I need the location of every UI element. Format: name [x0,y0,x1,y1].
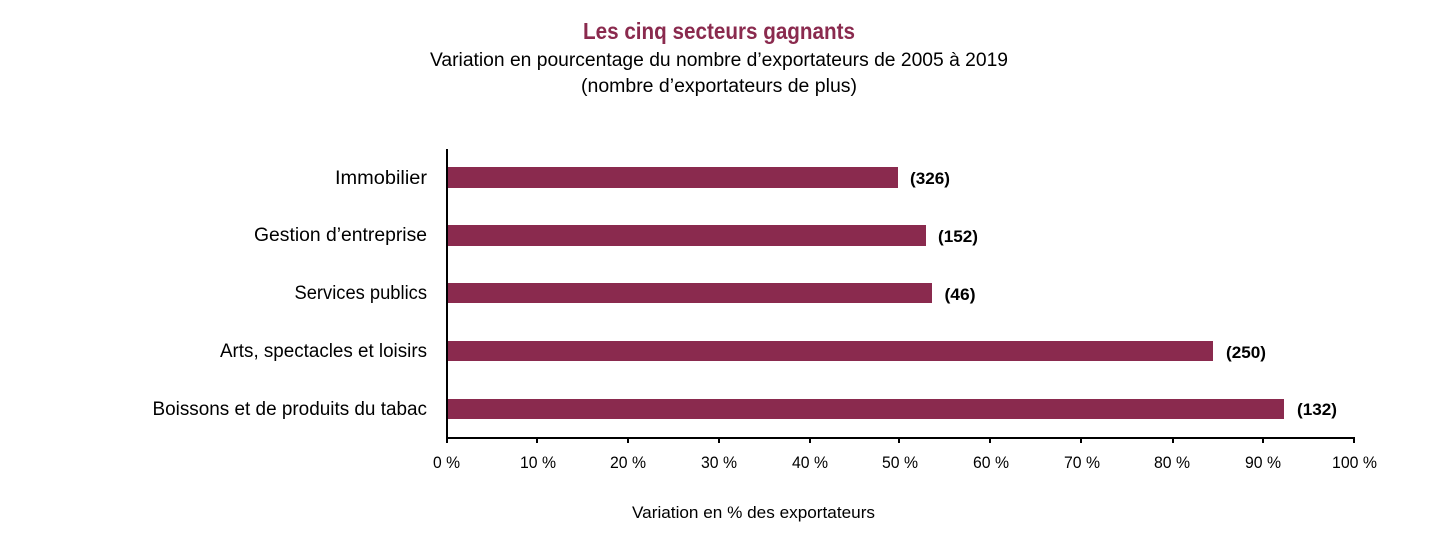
x axis tick labels: 100 % [1332,453,1377,472]
category labels: Arts, spectacles et loisirs [220,341,427,362]
bar value labels [910,169,1337,419]
x axis tick labels: 30 % [701,453,737,472]
subtitle: Variation en pourcentage du nombre d’exportateurs de 2005 à 2019 [430,50,1008,71]
x axis tick labels: 60 % [973,453,1009,472]
x axis tick labels: 10 % [520,453,556,472]
bar value labels: (46) [944,285,976,304]
x axis title: Variation en % des exportateurs [632,503,875,522]
category labels: Gestion d’entreprise [254,225,427,246]
subtitle note: (nombre d’exportateurs de plus) [581,76,857,97]
category labels [152,168,428,420]
bar value labels: (132) [1297,400,1337,419]
category labels: Services publics [294,283,427,304]
bar value labels: (326) [910,169,950,188]
x axis tick labels: 0 % [433,453,460,472]
category labels: Boissons et de produits du tabac [152,399,427,420]
x axis tick labels: 40 % [792,453,828,472]
x axis tick labels [433,453,1377,472]
x axis tick labels: 90 % [1245,453,1281,472]
axes [446,149,1355,443]
title: Les cinq secteurs gagnants [583,18,855,44]
bar chart [152,149,1377,522]
x axis tick labels: 70 % [1064,453,1100,472]
x axis tick labels: 50 % [882,453,918,472]
bar value labels: (152) [938,227,978,246]
x axis tick labels: 80 % [1154,453,1190,472]
category labels: Immobilier [335,168,428,189]
bar value labels: (250) [1226,343,1266,362]
x axis tick labels: 20 % [610,453,646,472]
bars [447,167,1284,419]
